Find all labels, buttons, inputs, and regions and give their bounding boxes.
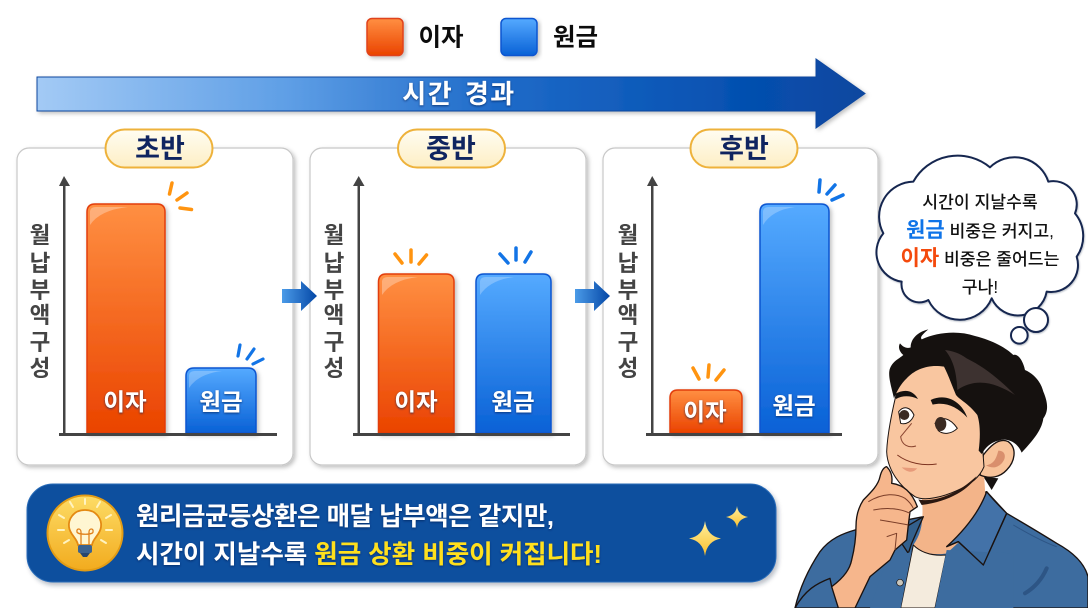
legend: interest swatch (367, 18, 403, 56)
y axis label: 성 (324, 356, 344, 381)
stage pill: early: 초반 (135, 134, 185, 164)
summary text line 2: 시간이 지날수록 원금 상환 비중이 커집니다! (136, 541, 602, 569)
stage pill: late: 후반 (719, 134, 769, 164)
undershirt (901, 545, 946, 608)
panel: early stage (17, 130, 293, 465)
character: thinking man (795, 329, 1088, 608)
emphasis marks: interest (693, 365, 724, 380)
bar: principal: 원금 (491, 389, 535, 415)
emphasis marks: interest (170, 183, 192, 210)
y axis label (618, 223, 639, 381)
stage pill: late (690, 130, 798, 168)
hair highlights (945, 350, 1015, 395)
y axis label: 액 (324, 303, 344, 328)
timeline label: 시간 경과 (402, 79, 516, 109)
stage pill: middle (398, 130, 505, 168)
bar: interest: 이자 (394, 389, 438, 415)
y axis label: 성 (30, 356, 50, 381)
bar: principal (476, 274, 551, 433)
eyes (899, 408, 914, 424)
bubble text: 구나! (962, 277, 998, 297)
cuff (795, 578, 838, 608)
y axis label: 부 (618, 278, 638, 303)
thought bubble (876, 156, 1083, 344)
panel: middle stage (310, 130, 586, 465)
emphasis marks: principal (819, 180, 843, 200)
emphasis marks: principal (500, 248, 531, 263)
face (887, 360, 984, 499)
bar: principal: 원금 (199, 389, 243, 415)
bubble text: 원금 비중은 커지고, (906, 219, 1054, 242)
y axis label: 구 (324, 330, 344, 355)
bubble text (901, 192, 1060, 297)
arrow: middle to late (575, 281, 610, 311)
y axis label: 액 (618, 303, 638, 328)
eyebrows (895, 391, 918, 399)
legend (367, 18, 598, 56)
panel: late stage (603, 130, 878, 465)
y axis label: 구 (618, 330, 638, 355)
collar and placket (947, 492, 1007, 565)
arrow: early to middle (282, 281, 317, 311)
timeline arrow (37, 59, 865, 128)
baseline (353, 433, 570, 436)
bar: principal (186, 368, 256, 433)
y axis label: 납 (30, 251, 51, 276)
y axis label: 구 (30, 330, 50, 355)
icon: sparkles (689, 506, 748, 556)
stage pill: early (106, 130, 212, 168)
y axis label: 납 (618, 251, 639, 276)
bar: interest (87, 204, 165, 433)
bubble text: 이자 비중은 줄어드는 (901, 247, 1060, 270)
y axis label: 부 (30, 278, 50, 303)
bubble text: 시간이 지날수록 (922, 192, 1038, 212)
shirt (795, 492, 1088, 608)
y axis (647, 176, 658, 434)
summary text line 1: 원리금균등상환은 매달 납부액은 같지만, (136, 503, 554, 531)
bar: interest: 이자 (683, 399, 727, 425)
y axis label: 성 (618, 356, 638, 381)
bar: interest (670, 390, 742, 433)
emphasis marks: interest (395, 250, 426, 264)
baseline (59, 433, 277, 436)
ear (980, 440, 1014, 477)
baseline (646, 433, 842, 436)
y axis label: 월 (618, 223, 638, 248)
y axis label (324, 223, 345, 381)
neck (913, 473, 987, 554)
legend: principal label: 원금 (553, 24, 598, 52)
bar: interest: 이자 (103, 389, 147, 415)
legend: principal swatch (501, 18, 537, 56)
summary banner (27, 484, 776, 582)
icon: light bulb (48, 496, 122, 570)
bar: principal (760, 204, 829, 433)
stage pill: middle: 중반 (426, 134, 476, 164)
hand (832, 467, 917, 608)
y axis label: 액 (30, 303, 50, 328)
bar: principal: 원금 (772, 393, 816, 419)
hair behind neck (983, 477, 998, 490)
bar: interest (378, 274, 454, 433)
y axis label: 월 (30, 223, 50, 248)
hair (889, 329, 1047, 454)
y axis label: 월 (324, 223, 344, 248)
y axis label: 부 (324, 278, 344, 303)
y axis label (30, 223, 51, 381)
nose and mouth (897, 423, 937, 465)
jaw shadow (918, 476, 977, 505)
legend: interest label: 이자 (418, 24, 464, 52)
y axis (59, 176, 70, 434)
emphasis marks: principal (238, 345, 263, 364)
y axis (353, 176, 364, 434)
y axis label: 납 (324, 251, 345, 276)
